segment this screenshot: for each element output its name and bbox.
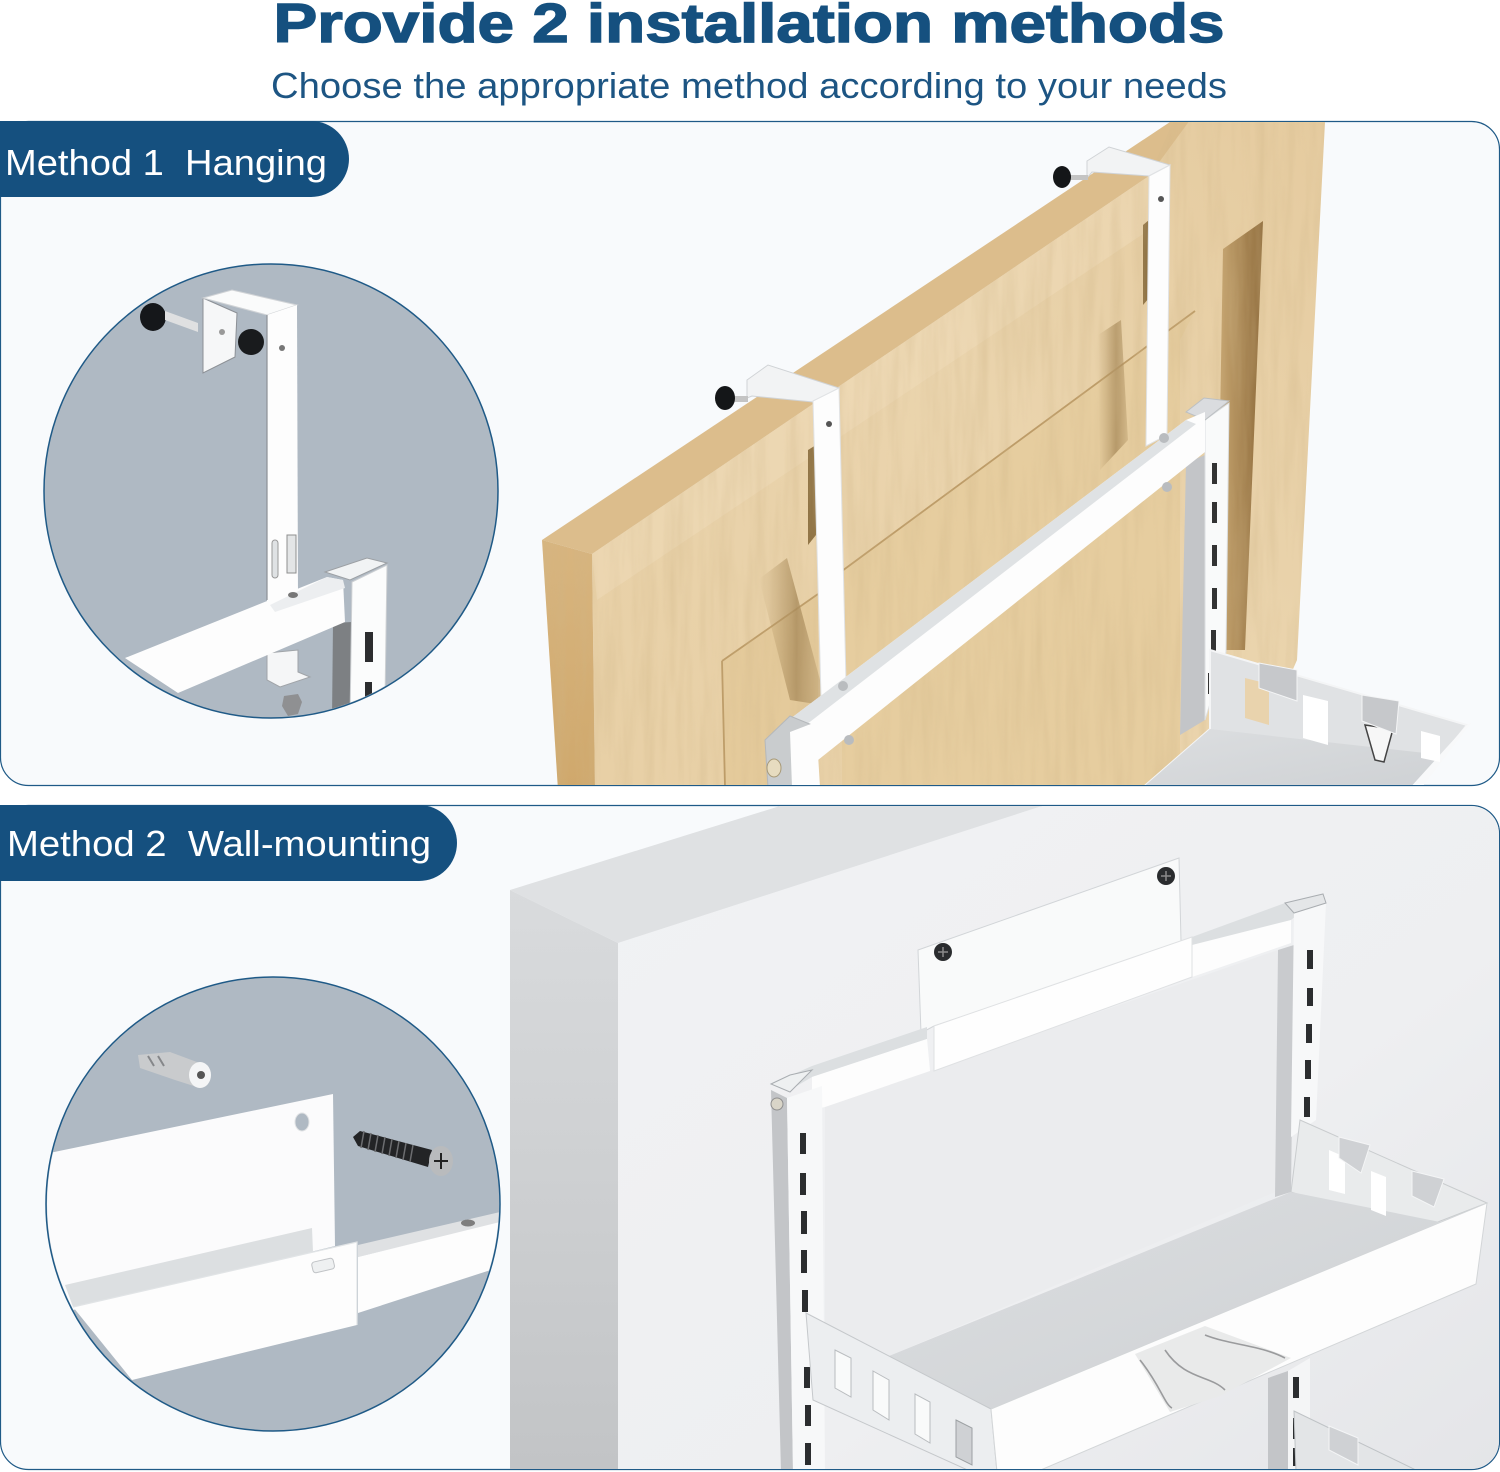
basket bbox=[806, 1120, 1487, 1472]
basket bbox=[1140, 650, 1472, 790]
panel: method 1 hanging bbox=[0, 120, 1500, 790]
illustration: wall bbox=[510, 806, 1500, 1470]
rack: frame bbox=[771, 894, 1326, 1472]
tab: method 2: Method 2 Wall-mounting bbox=[7, 823, 431, 864]
tab: method 1: Method 1 Hanging bbox=[5, 142, 327, 183]
illustration: wooden door with hanging rack bbox=[542, 120, 1325, 790]
callout: bracket detail bbox=[44, 264, 498, 720]
tab: method 2 bbox=[0, 805, 457, 881]
panel: method 2 wall-mounting bbox=[0, 805, 1500, 1472]
tab: method 1 bbox=[0, 121, 349, 197]
rack: crossbar and uprights bbox=[765, 398, 1229, 787]
rack: hanging brackets bbox=[715, 147, 1170, 697]
callout: wall plate detail bbox=[40, 977, 500, 1431]
mounting plate with screws bbox=[918, 858, 1192, 1033]
subtitle: Choose the appropriate method according to your needs bbox=[271, 65, 1227, 106]
